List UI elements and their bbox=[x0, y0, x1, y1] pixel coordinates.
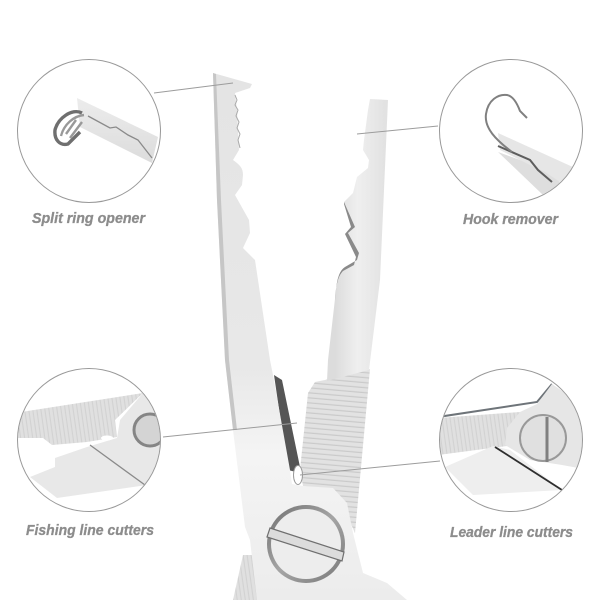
screw rim bbox=[267, 505, 345, 583]
left jaw shaded edge bbox=[213, 73, 237, 430]
oval hole at pivot bbox=[294, 466, 302, 484]
inset: hook detail bbox=[486, 95, 575, 195]
screw slot bbox=[267, 528, 344, 561]
pointer: leader line cutters bbox=[300, 461, 440, 475]
circle outline bbox=[18, 60, 160, 202]
cut line pointer bbox=[90, 445, 145, 485]
screw face bbox=[271, 509, 341, 579]
serrated dark edge bbox=[498, 146, 552, 182]
screw slot bbox=[546, 417, 548, 462]
upper blade bbox=[438, 412, 520, 455]
inset: cutter detail bbox=[15, 393, 166, 498]
inset: leader cutter detail bbox=[438, 384, 590, 495]
panel: fishing line cutters bbox=[15, 368, 166, 539]
pointer: split ring opener bbox=[154, 83, 233, 93]
right jaw inner bevel bbox=[335, 202, 359, 300]
upper jaw bbox=[498, 133, 575, 182]
circle outline bbox=[440, 368, 582, 512]
pivot screw bbox=[520, 415, 566, 461]
label: Split ring opener bbox=[32, 210, 146, 227]
blade top edge bbox=[438, 384, 552, 417]
ribbed grip section bbox=[300, 369, 370, 533]
lower blade and head bbox=[30, 393, 165, 498]
dark wedge behind left jaw bbox=[274, 375, 300, 472]
pointer: fishing line cutters bbox=[163, 423, 297, 437]
jaw serrations bbox=[235, 95, 240, 148]
panel: split ring opener bbox=[18, 60, 160, 227]
split ring inner coil bbox=[61, 115, 84, 138]
lower ribbed handle behind head bbox=[233, 555, 262, 600]
pliers bbox=[213, 73, 407, 600]
label: Leader line cutters bbox=[450, 524, 573, 541]
right jaw bbox=[327, 99, 388, 381]
lower blade bbox=[445, 446, 562, 495]
black cutting line bbox=[495, 447, 562, 490]
screw bbox=[267, 505, 345, 583]
slot hole bbox=[101, 436, 113, 440]
pointer lines bbox=[154, 83, 440, 475]
split ring bbox=[55, 112, 82, 144]
panel: leader line cutters bbox=[438, 368, 590, 541]
pointer: hook remover bbox=[357, 126, 438, 134]
label: Fishing line cutters bbox=[26, 522, 154, 539]
hook bbox=[486, 95, 527, 152]
lower jaw bbox=[498, 152, 562, 195]
head bbox=[506, 384, 582, 468]
upper blade bbox=[15, 393, 143, 445]
label: Hook remover bbox=[463, 211, 559, 228]
blade notch edge bbox=[88, 116, 152, 158]
circle outline bbox=[18, 368, 160, 512]
pivot screw bbox=[134, 414, 166, 446]
panel: hook remover bbox=[440, 60, 582, 228]
circle outline bbox=[440, 60, 582, 202]
left jaw and head bbox=[213, 73, 407, 600]
inset: split ring detail bbox=[55, 98, 158, 163]
blade tip bbox=[77, 98, 158, 163]
